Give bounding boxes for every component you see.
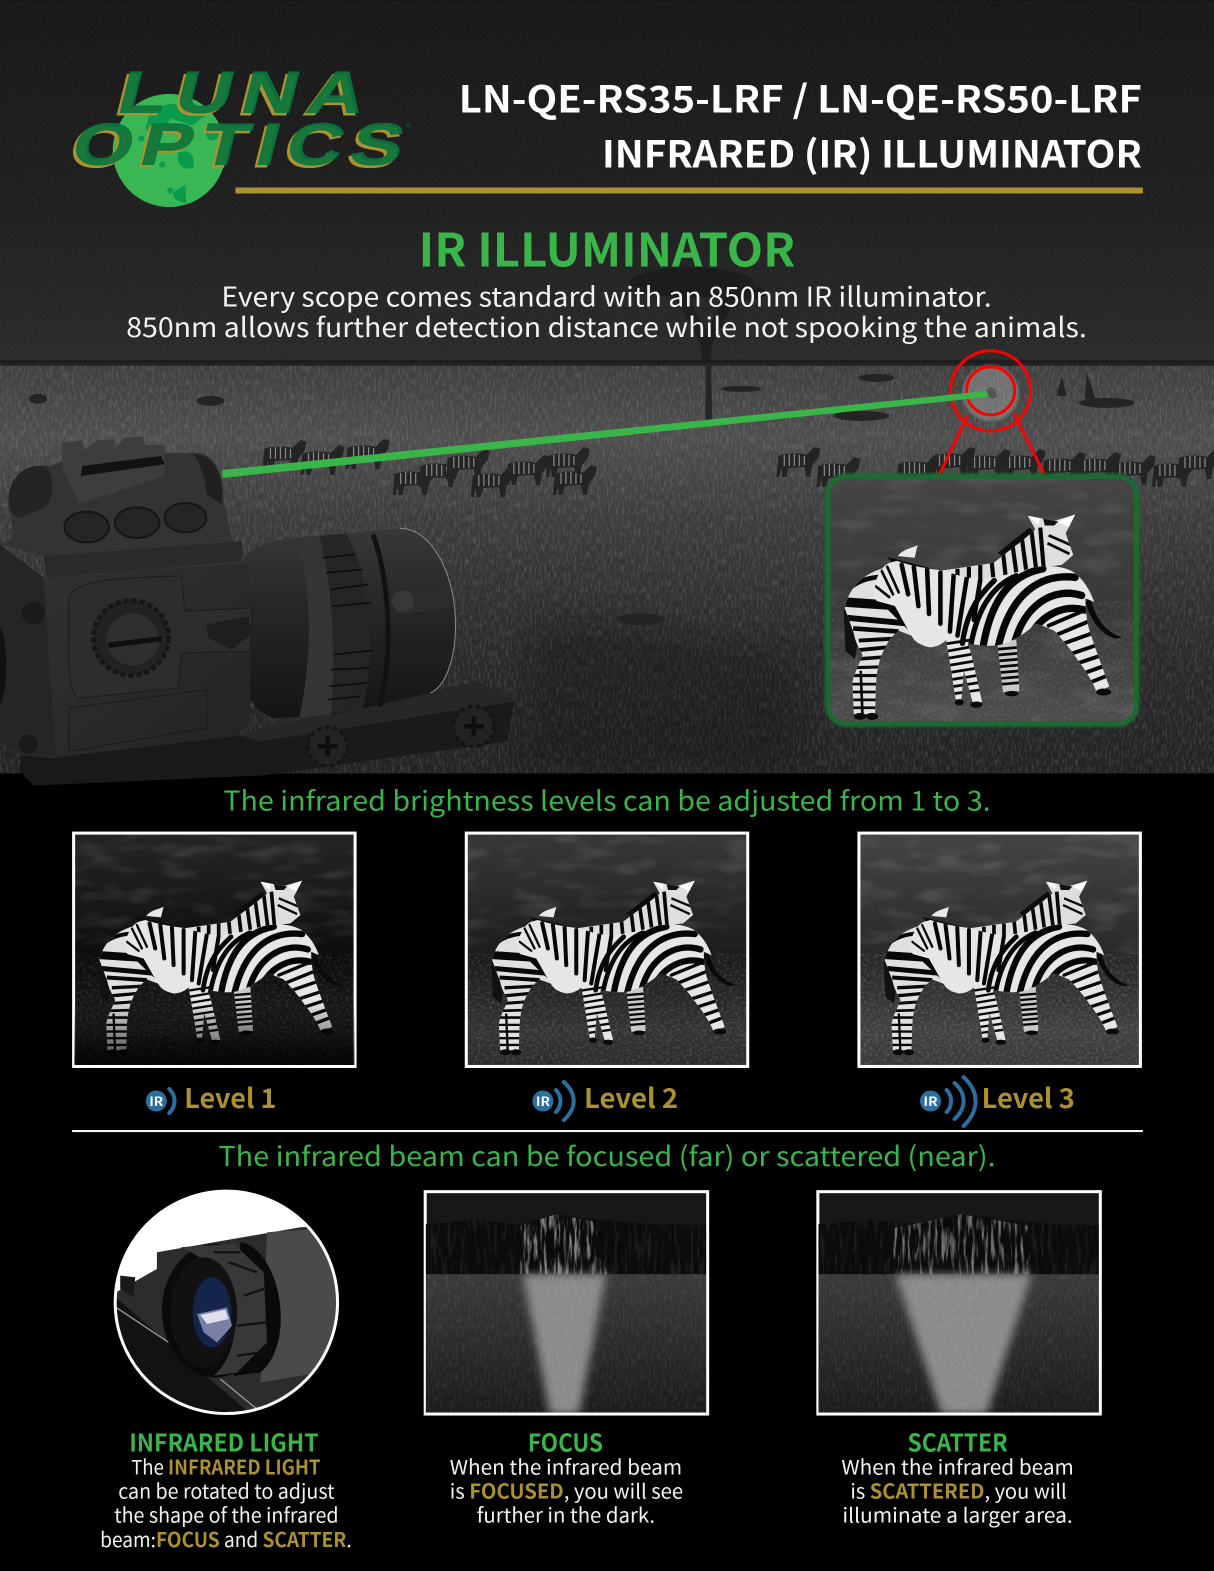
focused beam bbox=[523, 1274, 606, 1415]
focus caption: is FOCUSED, you will see bbox=[450, 1476, 683, 1505]
LUNA OPTICS wordmark: OPTICS bbox=[63, 113, 409, 180]
scope device bbox=[0, 437, 514, 785]
gold title rule bbox=[235, 188, 1143, 194]
scatter caption: When the infrared beam bbox=[841, 1452, 1074, 1481]
panel: night vision savanna scene bbox=[0, 0, 1214, 773]
title bbox=[459, 69, 1142, 178]
focus caption: further in the dark. bbox=[477, 1500, 655, 1529]
brightness caption: The infrared brightness levels can be adjusted from 1 to 3. bbox=[223, 780, 991, 819]
panel: focus photo bbox=[425, 1192, 708, 1415]
intro text bbox=[126, 276, 1087, 345]
top housing bbox=[0, 453, 242, 578]
savanna field bbox=[0, 363, 1214, 773]
LUNA OPTICS wordmark: OPTICS bbox=[66, 111, 412, 177]
dark tree line bbox=[426, 1214, 706, 1274]
level 1 label: IR bbox=[149, 1091, 164, 1110]
panel: level 3 photo bbox=[859, 833, 1140, 1066]
zebra inset bbox=[828, 477, 1136, 723]
focus caption bbox=[450, 1424, 683, 1529]
panel: lens photo bbox=[110, 1190, 347, 1423]
trunk over field bbox=[705, 363, 712, 421]
infrared light caption bbox=[100, 1424, 352, 1553]
LUNA OPTICS wordmark: ® bbox=[406, 120, 410, 133]
lit trees bbox=[893, 1214, 1030, 1274]
acacia tree bbox=[629, 268, 766, 421]
level 2 label: Level 2 bbox=[584, 1077, 678, 1116]
focus caption: FOCUS bbox=[528, 1424, 603, 1459]
focus caption: When the infrared beam bbox=[450, 1452, 682, 1481]
panel: level 2 photo bbox=[466, 833, 748, 1066]
infrared light caption: beam:FOCUS and SCATTER. bbox=[100, 1524, 352, 1553]
panel: scatter photo bbox=[818, 1192, 1100, 1415]
right zebra herd bbox=[776, 447, 1214, 487]
rail dark face bbox=[81, 456, 165, 476]
scatter caption: illuminate a larger area. bbox=[842, 1500, 1073, 1529]
title: INFRARED (IR) ILLUMINATOR bbox=[602, 124, 1142, 178]
scatter caption: SCATTER bbox=[907, 1424, 1008, 1459]
level 2 label: IR bbox=[536, 1091, 550, 1110]
LUNA OPTICS wordmark bbox=[63, 59, 412, 180]
scatter caption: is SCATTERED, you will bbox=[850, 1476, 1067, 1505]
globe bbox=[113, 94, 226, 207]
sky bbox=[0, 0, 1214, 363]
green IR beam bbox=[222, 391, 989, 478]
scatter caption bbox=[841, 1424, 1074, 1529]
main body bbox=[0, 544, 262, 785]
level 3 label bbox=[920, 1077, 1075, 1126]
target spot with red circles bbox=[940, 351, 1044, 474]
lit trees bbox=[519, 1214, 607, 1274]
divider bbox=[72, 1130, 1143, 1132]
infrared light caption: The INFRARED LIGHT bbox=[131, 1452, 321, 1481]
horizon mounds bbox=[29, 373, 1135, 625]
infrared light caption: INFRARED LIGHT bbox=[129, 1424, 319, 1459]
dark tree line bbox=[818, 1214, 1099, 1274]
logo bbox=[63, 59, 412, 207]
LUNA OPTICS wordmark: LUNA bbox=[109, 61, 370, 128]
beam caption: The infrared beam can be focused (far) or scattered (near). bbox=[218, 1135, 996, 1174]
intro text: 850nm allows further detection distance while not spooking the animals. bbox=[126, 306, 1087, 345]
lens barrel bbox=[242, 528, 455, 718]
level 3 label: IR bbox=[924, 1091, 938, 1110]
scattered beam bbox=[895, 1274, 1032, 1415]
level 2 label bbox=[532, 1077, 678, 1120]
level 3 label: Level 3 bbox=[982, 1077, 1075, 1116]
level 1 label: Level 1 bbox=[184, 1077, 276, 1116]
intro text: Every scope comes standard with an 850nm IR illuminator. bbox=[221, 276, 992, 315]
title: LN-QE-RS35-LRF / LN-QE-RS50-LRF bbox=[459, 69, 1142, 123]
section heading: IR ILLUMINATOR bbox=[419, 215, 795, 281]
LUNA OPTICS wordmark: LUNA bbox=[112, 59, 373, 125]
control buttons bbox=[65, 503, 206, 542]
mount rail bbox=[20, 681, 514, 785]
panel: level 1 photo bbox=[74, 833, 355, 1066]
left zebra herd bbox=[262, 439, 597, 497]
picatinny rail bbox=[62, 437, 165, 504]
lower field shade bbox=[521, 620, 801, 773]
infrared light caption: the shape of the infrared bbox=[114, 1500, 339, 1529]
infrared light caption: can be rotated to adjust bbox=[118, 1476, 335, 1505]
